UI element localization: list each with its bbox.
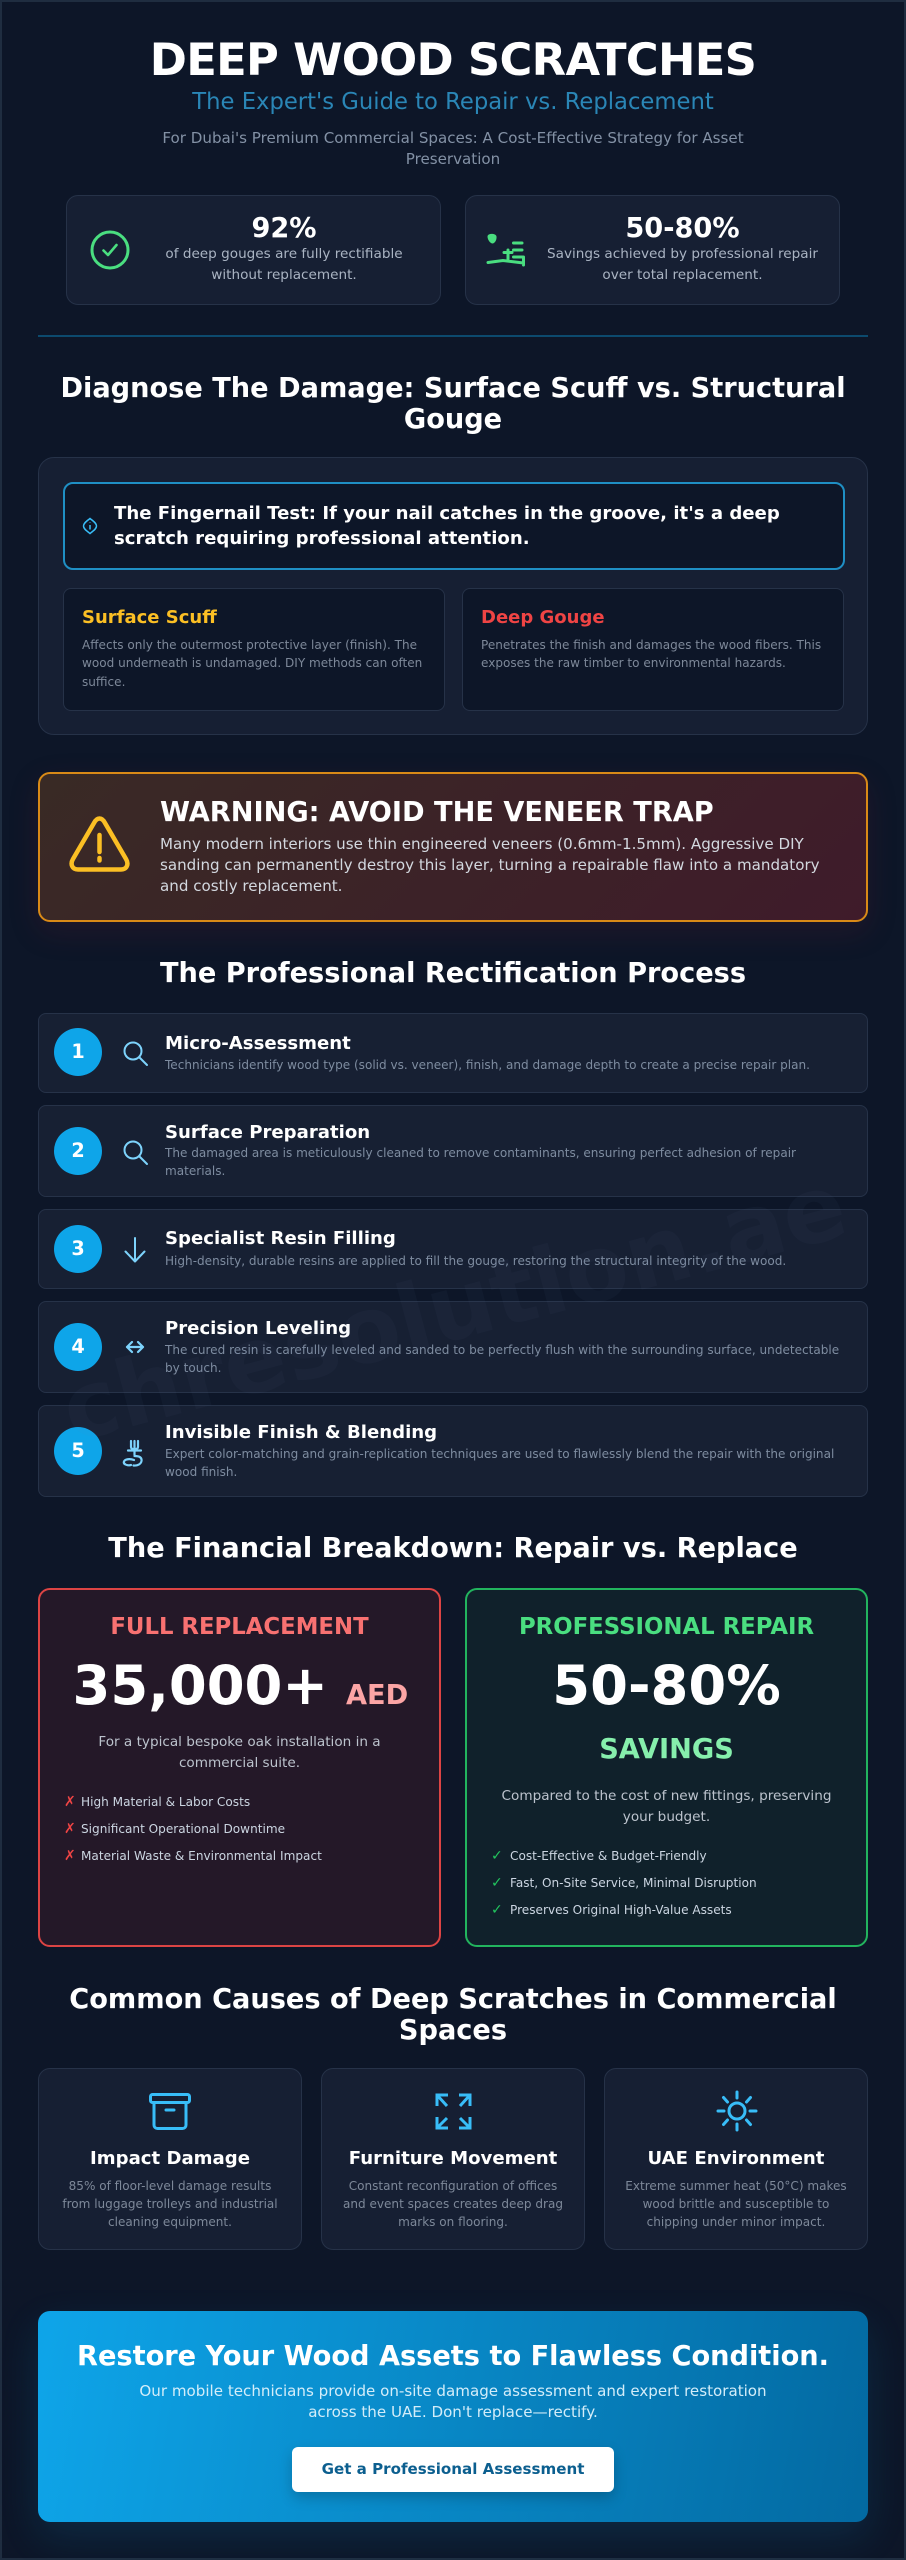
list item: ✓	[491, 1874, 503, 1890]
icon: magnifier	[124, 1042, 148, 1066]
list item: ✗	[64, 1794, 76, 1810]
card title: Furniture Movement	[349, 2148, 557, 2169]
card: impact damage	[38, 2068, 302, 2250]
step 3 number	[54, 1225, 102, 1273]
step 2 number	[54, 1127, 102, 1175]
panel: veneer warning	[38, 772, 868, 922]
warning text: sanding can permanently destroy this layer, turning a repairable flaw into a mandatory	[160, 856, 820, 874]
step 5 number	[54, 1427, 102, 1475]
list: repair benefits	[491, 1848, 757, 1918]
cta button	[292, 2447, 614, 2492]
panel text	[98, 1734, 381, 1771]
icon: check circle	[90, 230, 130, 270]
card text: 85% of floor-level damage results	[69, 2179, 271, 2193]
heading: diagnose	[60, 372, 846, 434]
card text: suffice.	[82, 675, 125, 689]
step 3	[38, 1209, 868, 1289]
panel text: your budget.	[623, 1809, 710, 1825]
heading: process: The Professional Rectification Process	[160, 958, 746, 989]
card heading: Deep Gouge	[481, 607, 605, 628]
panel: call to action	[38, 2311, 868, 2522]
card title: UAE Environment	[648, 2148, 824, 2169]
callout: fingernail test	[63, 482, 845, 570]
card text: Affects only the outermost protective layer (finish). The	[82, 638, 417, 652]
icon: expanding arrows	[436, 2094, 472, 2130]
list item: ✓	[491, 1902, 503, 1918]
list item: ✓	[491, 1848, 503, 1864]
icon: savings	[486, 234, 525, 266]
list: replacement drawbacks	[64, 1794, 322, 1864]
stat card: 50-80%	[465, 195, 840, 305]
card text: exposes the raw timber to environmental hazards.	[481, 656, 786, 670]
heading: causes: Common Causes of Deep Scratches in Commercial	[69, 1984, 837, 2015]
step 4 text: The cured resin is carefully leveled and sanded to be perfectly flush with the surrounding surface, undetectable	[165, 1343, 839, 1357]
panel heading: PROFESSIONAL REPAIR	[519, 1614, 814, 1640]
heading: financial: The Financial Breakdown: Repair vs. Replace	[108, 1533, 798, 1564]
panel text: commercial suite.	[179, 1755, 300, 1771]
card text: marks on flooring.	[398, 2215, 508, 2229]
icon: sun	[716, 2090, 758, 2132]
step 4 text: by touch.	[165, 1361, 221, 1375]
icon: info	[82, 518, 98, 534]
step 5 text: Expert color-matching and grain-replication techniques are used to flawlessly blend the repair with the original	[165, 1447, 834, 1461]
card text: wood brittle and susceptible to	[643, 2197, 829, 2211]
panel heading: FULL REPLACEMENT	[110, 1614, 369, 1640]
stat description: over total replacement.	[602, 267, 763, 283]
warning text: and costly replacement.	[160, 877, 342, 895]
cta heading: Restore Your Wood Assets to Flawless Condition.	[77, 2341, 829, 2372]
cta button: Get a Professional Assessment	[322, 2460, 584, 2478]
heading: causes: Spaces	[399, 2015, 507, 2046]
cta text: Our mobile technicians provide on-site damage assessment and expert restoration	[139, 2382, 767, 2400]
currency label: AED	[346, 1680, 408, 1711]
list item: ✗	[64, 1848, 76, 1864]
step 3 title: Specialist Resin Filling	[165, 1228, 396, 1249]
intro text: Preservation	[406, 150, 500, 168]
list item: High Material & Labor Costs	[81, 1795, 250, 1809]
panel text	[502, 1788, 831, 1825]
step 5	[38, 1405, 868, 1497]
panel text: For a typical bespoke oak installation in a	[98, 1734, 381, 1750]
card text: and event spaces creates deep drag	[343, 2197, 563, 2211]
card text	[625, 2179, 847, 2229]
savings figure: 50-80%	[552, 1654, 781, 1717]
card: surface scuff	[63, 588, 445, 711]
cta text: across the UAE. Don't replace—rectify.	[308, 2403, 598, 2421]
warning heading: WARNING: AVOID THE VENEER TRAP	[160, 797, 714, 828]
cost figure: 35,000+	[72, 1654, 328, 1717]
callout text	[114, 503, 780, 548]
stat description: without replacement.	[211, 267, 357, 283]
intro text	[162, 129, 744, 168]
title: DEEP WOOD SCRATCHES	[150, 33, 756, 86]
step 4 number	[54, 1323, 102, 1371]
step 2	[38, 1105, 868, 1197]
heading: diagnose: Diagnose The Damage: Surface Scuff vs. Structural	[60, 372, 846, 404]
card text: cleaning equipment.	[108, 2215, 232, 2229]
card text: Penetrates the finish and damages the wood fibers. This	[481, 638, 821, 652]
card text: Extreme summer heat (50°C) makes	[625, 2179, 847, 2193]
divider	[38, 335, 868, 337]
card title: Impact Damage	[90, 2148, 250, 2169]
step 5 text: wood finish.	[165, 1465, 237, 1479]
warning text: Many modern interiors use thin engineered veneers (0.6mm-1.5mm). Aggressive DIY	[160, 834, 804, 852]
list item: Significant Operational Downtime	[81, 1822, 285, 1836]
list item: Fast, On-Site Service, Minimal Disruption	[510, 1876, 757, 1890]
card text: Constant reconfiguration of offices	[349, 2179, 557, 2193]
stat card: 92%	[66, 195, 441, 305]
list item: Cost-Effective & Budget-Friendly	[510, 1848, 707, 1862]
warning text	[160, 834, 820, 895]
heading: diagnose: Gouge	[404, 404, 502, 434]
card: furniture movement	[321, 2068, 585, 2250]
stat description: Savings achieved by professional repair	[547, 246, 818, 262]
step 2 text: materials.	[165, 1164, 225, 1178]
card: uae environment	[604, 2068, 868, 2250]
step 4 title: Precision Leveling	[165, 1318, 351, 1339]
stat value: 92%	[251, 213, 317, 244]
icon: magnifier	[124, 1140, 148, 1165]
list item: Preserves Original High-Value Assets	[510, 1902, 732, 1916]
subtitle: The Expert's Guide to Repair vs. Replacement	[192, 89, 714, 115]
stat description: of deep gouges are fully rectifiable	[165, 246, 403, 262]
step 2 title: Surface Preparation	[165, 1122, 370, 1143]
panel: professional repair	[465, 1588, 868, 1947]
panel text: Compared to the cost of new fittings, preserving	[502, 1788, 831, 1804]
card text	[481, 638, 821, 670]
list item: Material Waste & Environmental Impact	[81, 1849, 322, 1863]
panel: diagnosis	[38, 457, 868, 735]
step 5 text	[165, 1447, 834, 1479]
step 2 text: The damaged area is meticulously cleaned to remove contaminants, ensuring perfect adhesion of repair	[165, 1146, 796, 1160]
watermark: chresolution.ae	[51, 1151, 857, 1464]
step 1 text: Technicians identify wood type (solid vs. veneer), finish, and damage depth to create a precise repair plan.	[165, 1058, 810, 1072]
step 3 number: 3	[71, 1237, 85, 1260]
stat description	[547, 246, 818, 283]
card text: chipping under minor impact.	[647, 2215, 825, 2229]
intro text: For Dubai's Premium Commercial Spaces: A Cost-Effective Strategy for Asset	[162, 129, 744, 147]
icon: bin	[149, 2093, 191, 2130]
step 5 number: 5	[71, 1439, 85, 1462]
stat description	[165, 246, 403, 283]
stat value: 50-80%	[625, 213, 740, 244]
step 4 text	[164, 1343, 839, 1375]
step 4 number: 4	[71, 1335, 85, 1358]
cta text	[139, 2382, 767, 2421]
card text: wood underneath is undamaged. DIY methods can often	[82, 656, 422, 670]
list item: ✗	[64, 1821, 76, 1837]
icon: arrow down	[124, 1237, 146, 1262]
step 2 number: 2	[71, 1139, 85, 1162]
step 1	[38, 1013, 868, 1093]
card: deep gouge	[462, 588, 844, 711]
icon: warning triangle	[69, 816, 130, 872]
card text	[82, 638, 422, 689]
heading: causes	[69, 1984, 837, 2046]
card heading: Surface Scuff	[82, 607, 217, 628]
panel: full replacement	[38, 1588, 441, 1947]
step 1 number: 1	[71, 1040, 85, 1063]
step 1 number	[54, 1028, 102, 1076]
step 3 text: High-density, durable resins are applied to fill the gouge, restoring the structural integrity of the wood.	[165, 1254, 786, 1268]
step 1 title: Micro-Assessment	[165, 1033, 351, 1054]
icon: blending tool	[122, 1440, 143, 1467]
callout text: scratch requiring professional attention.	[114, 528, 530, 548]
card text	[62, 2179, 278, 2229]
card text: from luggage trolleys and industrial	[62, 2197, 278, 2211]
step 2 text	[164, 1146, 796, 1178]
savings label: SAVINGS	[599, 1734, 734, 1765]
step 4	[38, 1301, 868, 1393]
card text	[343, 2179, 563, 2229]
icon: horizontal arrows	[126, 1340, 144, 1354]
callout text: The Fingernail Test: If your nail catches in the groove, it's a deep	[114, 503, 780, 524]
step 5 title: Invisible Finish & Blending	[165, 1422, 437, 1443]
